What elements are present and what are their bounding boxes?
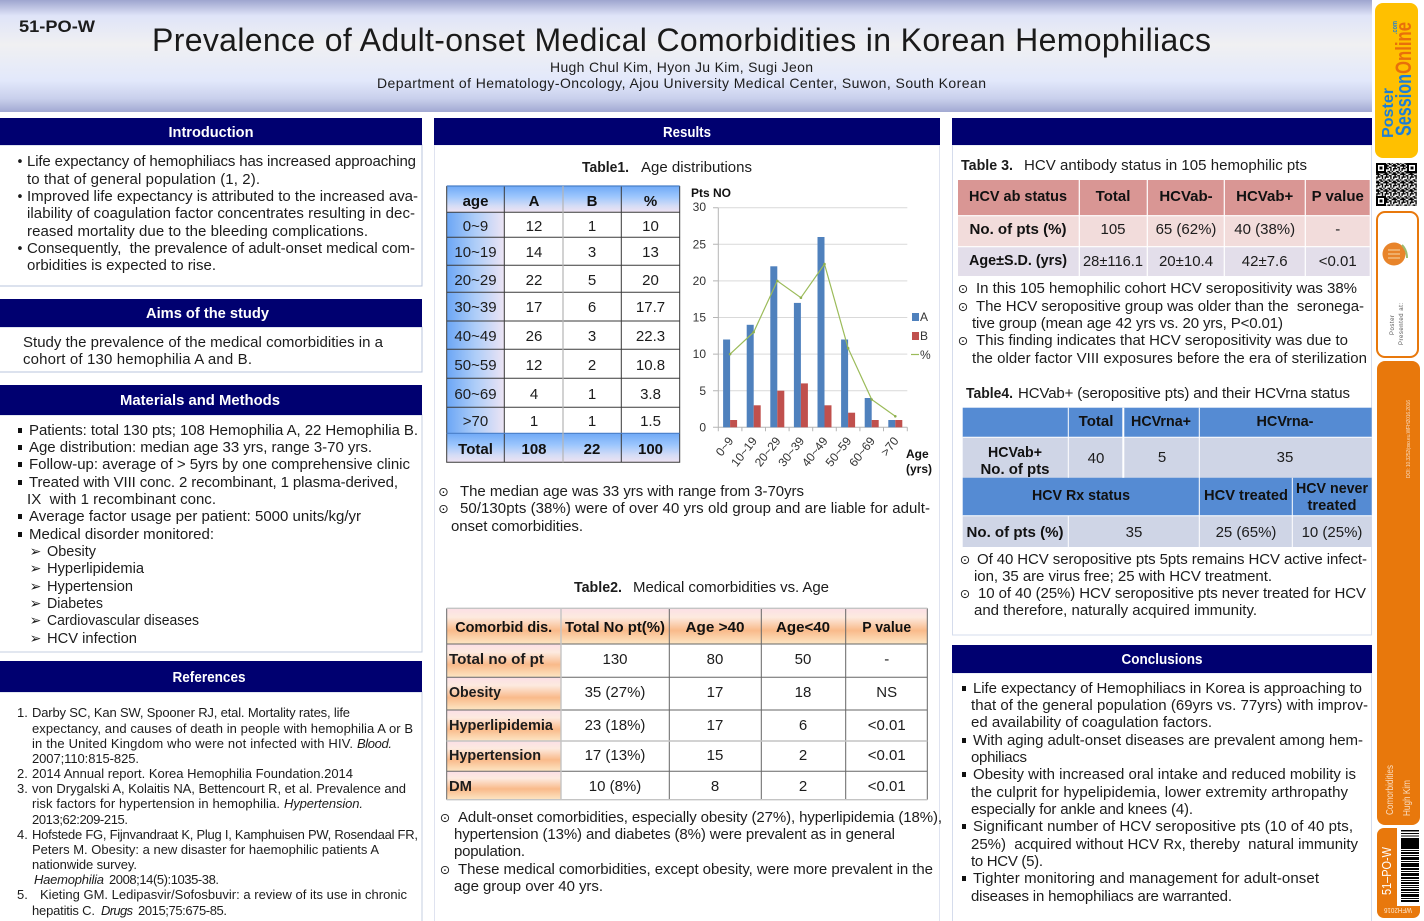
table 1: age distributions: 20 <box>642 272 659 289</box>
table 4 notes <box>960 551 1367 619</box>
table 1: age distributions: % <box>644 193 657 210</box>
sidebar: QR code <box>1376 163 1417 206</box>
authors: Hugh Chul Kim, Hyon Ju Kim, Sugi Jeon <box>550 59 813 75</box>
y axis labels: 0 <box>699 420 706 434</box>
table 4: HCV RNA status: 5 <box>1158 449 1166 466</box>
y axis labels <box>691 186 731 434</box>
table 2: comorbidities vs age: 17 <box>707 684 723 701</box>
affiliation: Department of Hematology-Oncology, Ajou University Medical Center, Suwon, South Korean <box>377 75 986 91</box>
x axis labels: 60~69 <box>846 434 878 469</box>
table 3 caption: Table 3. <box>961 157 1013 174</box>
table 4: HCV RNA status: HCV Rx status <box>1032 487 1130 504</box>
sidebar: poster session online logo <box>1375 3 1418 158</box>
reference list: Darby SC, Kan SW, Spooner RJ, etal. Mortality rates, life <box>32 705 350 720</box>
table 1: age distributions: 1 <box>588 386 596 403</box>
methods list: ➢ <box>30 544 42 560</box>
conclusions list: to HCV (5). <box>971 853 1043 870</box>
table 1: age distributions: 10 <box>642 218 659 235</box>
table 1 notes: 50/130pts (38%) were of over 40 yrs old group and are liable for adult- <box>460 500 930 517</box>
table 3: HCV antibody status: 28±116.1 <box>1083 253 1143 270</box>
table 1: age distributions: 10.8 <box>636 357 665 374</box>
table 1 notes: ⊙ <box>438 501 449 516</box>
introduction text <box>16 153 418 274</box>
table 1: age distributions: 14 <box>526 244 542 261</box>
table 3 notes: This finding indicates that HCV seropositivity was due to <box>976 332 1348 349</box>
y axis labels: 10 <box>693 347 706 361</box>
table 3 notes: ⊙ <box>958 333 968 348</box>
table 1: age distributions: 30~39 <box>454 299 497 316</box>
x axis labels: 50~59 <box>823 434 855 469</box>
heading: materials and methods: Materials and Methods <box>120 393 280 409</box>
methods list: Treated with VIII conc. 2 recombinant, 1 plasma-derived, <box>29 474 398 491</box>
table 4 notes: and therefore, naturally acquired immunity. <box>974 602 1257 619</box>
table 2: comorbidities vs age: 6 <box>799 717 807 734</box>
table 4: HCV RNA status: 10 (25%) <box>1302 524 1362 541</box>
aims text: cohort of 130 hemophilia A and B. <box>23 351 252 368</box>
table 4: HCV RNA status: treated <box>1308 497 1356 514</box>
table 4: HCV RNA status: 25 (65%) <box>1216 524 1276 541</box>
table 4: HCV RNA status: 35 <box>1277 449 1293 466</box>
table 3: HCV antibody status: No. of pts (%) <box>970 221 1066 238</box>
x axis labels: (yrs) <box>906 462 932 476</box>
table 3 notes: the older factor VIII exposures before the era of sterilization <box>972 350 1367 367</box>
table 2 notes: Adult-onset comorbidities, especially obesity (27%), hyperlipidemia (18%), <box>458 809 942 826</box>
table 3: HCV antibody status: 105 <box>1100 221 1126 238</box>
reference list: Kieting GM. Ledipasvir/Sofosbuvir: a review of its use in chronic <box>40 887 408 902</box>
conclusions list: diseases in hemophiliacs are warranted. <box>971 888 1232 905</box>
chart legend <box>911 310 931 362</box>
table 2: comorbidities vs age: <0.01 <box>868 717 906 734</box>
sidebar: poster number and barcode <box>1377 828 1420 918</box>
table 4: HCV RNA status: No. of pts (%) <box>966 524 1064 541</box>
introduction text: ilability of coagulation factor concentrates resulting in dec- <box>27 205 415 222</box>
y axis labels: 20 <box>693 274 706 288</box>
aims text: Study the prevalence of the medical comorbidities in a <box>23 334 384 351</box>
table 2 caption: Medical comorbidities vs. Age <box>633 579 829 596</box>
chart: age distribution bars and line <box>691 186 932 476</box>
table 1: age distributions: 26 <box>526 328 542 345</box>
x axis labels: 10~19 <box>728 434 760 469</box>
conclusions list: Significant number of HCV seropositive pts (10 of 40 pts, <box>973 818 1353 835</box>
y axis labels: 15 <box>693 310 706 324</box>
introduction text: Improved life expectancy is attributed to the increased ava- <box>27 188 418 205</box>
aims text <box>23 334 384 368</box>
table 2 caption: Table2. <box>574 579 622 596</box>
table 1 caption: Table1. <box>582 159 629 176</box>
table 4 notes: ion, 35 are virus free; 25 with HCV treatment. <box>974 568 1272 585</box>
methods list: ➢ <box>30 579 42 595</box>
table 1: age distributions: 5 <box>588 272 596 289</box>
chart legend: B <box>920 329 928 343</box>
introduction text: • <box>16 155 24 170</box>
reference list: 2007;110:815-825. <box>32 751 139 766</box>
methods list: Diabetes <box>47 595 103 612</box>
table 1: age distributions: 1 <box>588 218 596 235</box>
barcode <box>1401 830 1419 902</box>
table 3 notes: The HCV seropositive group was older than the seronega- <box>976 298 1364 315</box>
table 4 caption: Table4. <box>966 385 1013 402</box>
y axis labels: 30 <box>693 200 706 214</box>
reference list <box>17 705 418 918</box>
y axis labels: 25 <box>693 238 706 252</box>
reference list: in the United Kingdom who were not infected with HIV. <box>32 736 353 751</box>
conclusions list: Life expectancy of Hemophiliacs in Korea is approaching to <box>973 680 1362 697</box>
table 2: comorbidities vs age: Hyperlipidemia <box>449 717 554 734</box>
sidebar: poster number and barcode: 51–PO-W <box>1379 846 1394 895</box>
table 1: age distributions: 2 <box>588 357 596 374</box>
methods list: ➢ <box>30 613 42 629</box>
table 3 notes: tive group (mean age 42 yrs vs. 20 yrs, P<0.01) <box>972 315 1283 332</box>
table 2: comorbidities vs age <box>447 608 927 800</box>
table 2: comorbidities vs age: 17 (13%) <box>585 747 645 764</box>
table 1: age distributions: 0~9 <box>463 218 488 235</box>
panel: introduction <box>0 118 422 286</box>
table 4: HCV RNA status: HCV never <box>1296 480 1368 497</box>
table 3: HCV antibody status: 42±7.6 <box>1242 253 1288 270</box>
table 3 notes: ⊙ <box>958 281 968 296</box>
table 2 notes: population. <box>454 843 525 860</box>
table 3 notes: In this 105 hemophilic cohort HCV seropositivity was 38% <box>976 280 1357 297</box>
reference list: 3. <box>17 781 28 796</box>
table 2: comorbidities vs age: 17 <box>707 717 723 734</box>
table 2: comorbidities vs age: Age >40 <box>686 619 744 636</box>
methods list: Obesity <box>47 543 96 560</box>
table 1: age distributions: Total <box>458 441 493 458</box>
table 2 notes: These medical comorbidities, except obesity, were more prevalent in the <box>458 861 933 878</box>
table 3: HCV antibody status: <0.01 <box>1319 253 1357 270</box>
sidebar: orange metadata strip: Hugh Kim <box>1402 780 1413 816</box>
bars: series B <box>730 383 902 427</box>
table 4 caption: HCVab+ (seropositive pts) and their HCVrna status <box>1018 385 1350 402</box>
table 2 notes: age group over 40 yrs. <box>454 878 603 895</box>
table 1: age distributions: 100 <box>638 441 663 458</box>
x axis labels: 0~9 <box>713 434 737 459</box>
table 4: HCV RNA status: HCVrna- <box>1256 413 1314 430</box>
table 1: age distributions: 40~49 <box>454 328 497 345</box>
methods list: Hyperlipidemia <box>47 560 145 577</box>
introduction text: to that of general population (1, 2). <box>27 171 260 188</box>
conclusions list <box>962 680 1368 905</box>
table 1 notes: ⊙ <box>438 484 449 499</box>
conclusions list: Obesity with increased oral intake and reduced mobility is <box>973 766 1356 783</box>
table 1: age distributions: 6 <box>588 299 596 316</box>
table 1: age distributions: 108 <box>521 441 547 458</box>
table 1: age distributions: 1.5 <box>640 413 661 430</box>
table 4: HCV RNA status <box>963 408 1372 547</box>
table 2: comorbidities vs age: 2 <box>799 747 807 764</box>
table 2: comorbidities vs age: P value <box>862 619 911 636</box>
table 3: HCV antibody status: 40 (38%) <box>1234 221 1295 238</box>
table 1: age distributions: 17 <box>526 299 542 316</box>
methods list: Hypertension <box>47 578 133 595</box>
table 3: HCV antibody status: P value <box>1312 188 1364 205</box>
table 2: comorbidities vs age: 35 (27%) <box>585 684 645 701</box>
x axis labels: 30~39 <box>775 434 807 469</box>
methods list: Patients: total 130 pts; 108 Hemophilia A, 22 Hemophilia B. <box>29 422 418 439</box>
table 2: comorbidities vs age: DM <box>449 778 472 795</box>
line: percent series <box>729 263 897 418</box>
table 2: comorbidities vs age: Total no of pt <box>449 651 544 668</box>
chart legend: A <box>920 310 928 324</box>
table 4: HCV RNA status: HCVrna+ <box>1131 413 1191 430</box>
table 1 notes: The median age was 33 yrs with range from 3-70yrs <box>460 483 804 500</box>
header banner <box>0 0 1372 112</box>
x axis labels: 40~49 <box>799 434 831 469</box>
reference list: risk factors for hypertension in hemophilia. <box>32 796 280 811</box>
sidebar: poster session online logo: Online <box>1391 22 1416 74</box>
table 1: age distributions: 10~19 <box>454 244 497 261</box>
heading: results: Results <box>663 125 711 141</box>
table 3: HCV antibody status: HCV ab status <box>969 188 1067 205</box>
table 2: comorbidities vs age: 8 <box>711 778 719 795</box>
conclusions list: ophiliacs <box>971 749 1027 766</box>
table 3: HCV antibody status: - <box>1335 221 1340 238</box>
table 3: HCV antibody status: 65 (62%) <box>1156 221 1216 238</box>
x axis labels: 20~29 <box>752 434 784 469</box>
table 2 notes: ⊙ <box>440 810 450 825</box>
table 3: HCV antibody status: HCVab- <box>1159 188 1213 205</box>
methods list: Follow-up: average of > 5yrs by one comprehensive clinic <box>29 456 410 473</box>
reference list: hepatitis C. <box>32 903 95 918</box>
reference list: 2008;14(5):1035-38. <box>109 872 219 887</box>
table 1: age distributions: 60~69 <box>454 386 497 403</box>
sidebar: orange metadata strip: DOI: 10.3252/pso.eu.WFH2016.2016 <box>1406 400 1412 478</box>
table 3 caption: HCV antibody status in 105 hemophilic pts <box>1024 157 1307 174</box>
methods list: IX with 1 recombinant conc. <box>27 491 216 508</box>
sidebar: poster number and barcode: WFH2016 <box>1384 906 1412 913</box>
introduction text: • <box>16 190 24 205</box>
table 4: HCV RNA status: HCV treated <box>1204 487 1288 504</box>
table 1: age distributions: 12 <box>526 357 542 374</box>
table 1 caption: Age distributions <box>641 159 752 176</box>
table 1: age distributions: 20~29 <box>454 272 497 289</box>
table 1: age distributions: B <box>587 193 598 210</box>
table 2: comorbidities vs age: <0.01 <box>868 747 906 764</box>
sidebar: poster session online logo: Session <box>1391 74 1416 136</box>
table 1: age distributions <box>447 186 680 462</box>
introduction text: Life expectancy of hemophiliacs has increased approaching <box>27 153 416 170</box>
introduction text: Consequently, the prevalence of adult-onset medical com- <box>27 240 415 257</box>
table 4 notes: Of 40 HCV seropositive pts 5pts remains HCV active infect- <box>977 551 1367 568</box>
reference list: Blood. <box>357 736 392 751</box>
table 4 notes: ⊙ <box>960 552 970 567</box>
table 3 notes: ⊙ <box>958 299 968 314</box>
table 1: age distributions: 13 <box>642 244 659 261</box>
table 3: HCV antibody status: Age±S.D. (yrs) <box>969 252 1067 269</box>
table 4: HCV RNA status: 35 <box>1126 524 1142 541</box>
table 2: comorbidities vs age: Age<40 <box>776 619 830 636</box>
table 1: age distributions: 12 <box>526 218 542 235</box>
table 1: age distributions: >70 <box>463 413 488 430</box>
conclusions list: that of the general population (69yrs vs. 77yrs) with improv- <box>971 697 1368 714</box>
table 3: HCV antibody status: Total <box>1096 188 1130 205</box>
y axis labels: 5 <box>699 384 706 398</box>
bars: series A <box>723 237 895 427</box>
sidebar: poster session online logo: Poster <box>1380 88 1397 138</box>
table 1: age distributions: 50~59 <box>454 357 497 374</box>
table 4: HCV RNA status: HCVab+ <box>988 444 1042 461</box>
table 2: comorbidities vs age: NS <box>876 684 897 701</box>
panel: aims of the study <box>0 299 422 372</box>
table 2: comorbidities vs age: 10 (8%) <box>589 778 641 795</box>
heading: aims: Aims of the study <box>146 306 269 322</box>
table 4 notes: ⊙ <box>960 586 970 601</box>
table 2: comorbidities vs age: 15 <box>707 747 723 764</box>
methods list: Average factor usage per patient: 5000 units/kg/yr <box>29 508 361 525</box>
reference list: expectancy, and causes of death in people with hemophilia A or B <box>32 721 413 736</box>
table 1: age distributions: 4 <box>530 386 538 403</box>
sidebar: presented at box: Presented at: <box>1399 303 1405 345</box>
conclusions list: ed availability of coagulation factors. <box>971 714 1212 731</box>
table 2: comorbidities vs age: <0.01 <box>868 778 906 795</box>
sidebar: poster session online logo: .com <box>1392 21 1399 34</box>
reference list: 2. <box>17 766 28 781</box>
table 2 notes: ⊙ <box>440 862 450 877</box>
introduction text: • <box>16 242 24 257</box>
table 3 notes <box>958 280 1367 367</box>
table 4: HCV RNA status: Total <box>1079 413 1113 430</box>
table 2: comorbidities vs age: 50 <box>795 651 811 668</box>
table 1: age distributions: 3 <box>588 328 596 345</box>
heading: conclusions: Conclusions <box>1122 652 1202 668</box>
table 2: comorbidities vs age: - <box>884 651 889 668</box>
table 1: age distributions: 22 <box>584 441 600 458</box>
table 2: comorbidities vs age: 23 (18%) <box>585 717 645 734</box>
table 1 notes: onset comorbidities. <box>451 518 583 535</box>
table 2: comorbidities vs age: Obesity <box>449 684 502 701</box>
x axis labels <box>713 434 932 476</box>
table 1 caption <box>582 159 752 176</box>
methods list: Medical disorder monitored: <box>29 526 214 543</box>
reference list: 4. <box>17 827 28 842</box>
table 2: comorbidities vs age: Total No pt(%) <box>565 619 665 636</box>
sidebar: presented at box <box>1377 212 1418 357</box>
methods list <box>18 422 418 647</box>
conclusions list: Tighter monitoring and management for adult-onset <box>973 870 1320 887</box>
methods list: ➢ <box>30 596 42 612</box>
conclusions list: With aging adult-onset diseases are prevalent among hem- <box>973 732 1363 749</box>
table 1: age distributions: 17.7 <box>636 299 665 316</box>
reference list: 5. <box>17 887 28 902</box>
conclusions list: 25%) acquired without HCV Rx, thereby natural immunity <box>971 836 1358 853</box>
icon: congress logo <box>1382 242 1407 266</box>
reference list: 2014 Annual report. Korea Hemophilia Foundation.2014 <box>32 766 353 781</box>
table 3: HCV antibody status <box>958 180 1370 276</box>
table 3: HCV antibody status: HCVab+ <box>1236 188 1293 205</box>
conclusions list: especially for ankle and knees (4). <box>971 801 1193 818</box>
sidebar: presented at box: Poster <box>1390 315 1396 335</box>
introduction text: orbidities is expected to rise. <box>27 257 216 274</box>
panel: references <box>0 661 422 921</box>
table 1: age distributions: 3 <box>588 244 596 261</box>
panel: materials and methods <box>0 385 422 652</box>
panel: results continued <box>952 118 1372 635</box>
x axis labels: Age <box>906 447 929 461</box>
introduction text: reased mortality due to the bleeding complications. <box>27 223 368 240</box>
table 1: age distributions: 1 <box>588 413 596 430</box>
poster code: 51-PO-W <box>19 17 96 36</box>
table 1 notes <box>438 483 930 535</box>
table 2: comorbidities vs age: 80 <box>707 651 723 668</box>
panel: conclusions <box>952 645 1372 921</box>
table 1: age distributions: 3.8 <box>640 386 661 403</box>
x axis labels: >70 <box>878 434 902 459</box>
table 2 notes <box>440 809 942 895</box>
table 2: comorbidities vs age: 2 <box>799 778 807 795</box>
reference list: von Drygalski A, Kolaitis NA, Bettencourt R, et al. Prevalence and <box>32 781 406 796</box>
reference list: 2013;62:209-215. <box>32 812 128 827</box>
table 1: age distributions: 1 <box>530 413 538 430</box>
table 1: age distributions: A <box>529 193 540 210</box>
methods list: Cardiovascular diseases <box>47 612 199 629</box>
table 2: comorbidities vs age: Hypertension <box>449 747 541 764</box>
table 4: HCV RNA status: 40 <box>1088 450 1104 467</box>
y axis labels: Pts NO <box>691 186 731 200</box>
reference list: 2015;75:675-85. <box>138 903 227 918</box>
methods list: Age distribution: median age 33 yrs, range 3-70 yrs. <box>29 439 372 456</box>
heading: introduction: Introduction <box>168 125 254 141</box>
table 1: age distributions: age <box>463 193 488 210</box>
reference list: nationwide survey. <box>32 857 137 872</box>
conclusions list: the culprit for hypelipidemia, lower extremity arthropathy <box>971 784 1348 801</box>
reference list: Hypertension. <box>284 796 363 811</box>
methods list: ➢ <box>30 631 42 647</box>
reference list: 1. <box>17 705 28 720</box>
table 1: age distributions: 22 <box>526 272 542 289</box>
table 3: HCV antibody status: 20±10.4 <box>1159 253 1213 270</box>
reference list: Haemophilia <box>34 872 104 887</box>
table 2: comorbidities vs age: 130 <box>602 651 628 668</box>
sidebar: orange metadata strip: Comorbidities <box>1385 765 1396 815</box>
panel: results <box>434 118 942 921</box>
reference list: Hofstede FG, Fijnvandraat K, Plug I, Kamphuisen PW, Rosendaal FR, <box>32 827 418 842</box>
table 4 notes: 10 of 40 (25%) HCV seropositive pts never treated for HCV <box>978 585 1366 602</box>
title: Prevalence of Adult-onset Medical Comorbidities in Korean Hemophiliacs <box>152 22 1211 58</box>
reference list: Drugs <box>101 903 134 918</box>
methods list: ➢ <box>30 561 42 577</box>
table 4: HCV RNA status: No. of pts <box>980 461 1050 478</box>
reference list: Peters M. Obesity: a new disaster for haemophilic patients A <box>32 842 379 857</box>
table 2: comorbidities vs age: 18 <box>795 684 811 701</box>
table 2: comorbidities vs age: Comorbid dis. <box>455 619 552 636</box>
table 1: age distributions: 22.3 <box>636 328 665 345</box>
table 2 notes: hypertension (13%) and diabetes (8%) were prevalent as in general <box>454 826 895 843</box>
chart legend: % <box>920 348 931 362</box>
methods list: HCV infection <box>47 630 137 647</box>
heading: references: References <box>172 670 246 686</box>
sidebar: orange metadata strip <box>1377 361 1420 825</box>
